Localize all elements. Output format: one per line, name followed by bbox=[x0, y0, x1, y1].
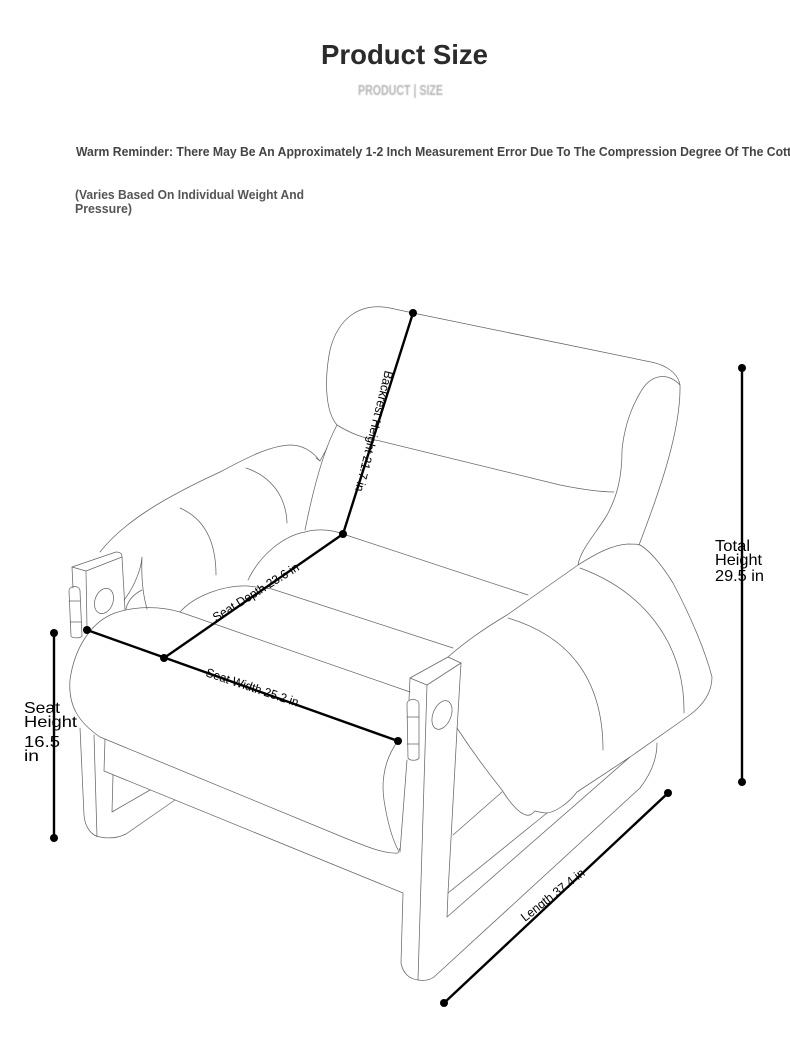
subtitle: PRODUCT | SIZE bbox=[358, 83, 443, 99]
dimension: total height: 29.5 in bbox=[715, 568, 764, 585]
pressure note: Pressure) bbox=[75, 202, 132, 216]
dimension: seat depth: Seat Depth 23.6 in bbox=[210, 560, 302, 625]
dimension: seat width: Seat Width 25.2 in bbox=[204, 666, 301, 710]
dimension: total height bbox=[715, 364, 764, 786]
dimension: length bbox=[440, 789, 672, 1007]
dimension: seat height: Height bbox=[24, 714, 78, 731]
chair frame base bbox=[80, 728, 657, 980]
dimension: backrest height: Backrest Height 21.7 in bbox=[352, 369, 396, 493]
seat cushion back section bbox=[180, 530, 528, 648]
pressure note bbox=[75, 188, 304, 216]
front seat cushion bbox=[70, 608, 410, 853]
dimension: length: Length 37.4 in bbox=[518, 866, 588, 924]
dimension: total height: Total bbox=[715, 538, 750, 555]
title: Product Size bbox=[321, 39, 488, 70]
dimension: backrest height bbox=[339, 309, 417, 538]
dimension: seat height: in bbox=[24, 748, 39, 765]
armchair line drawing bbox=[69, 307, 712, 980]
dimension: seat height bbox=[24, 629, 78, 842]
dimension: seat depth bbox=[160, 534, 343, 662]
right armrest bbox=[448, 544, 712, 815]
left front post with hinge bbox=[69, 552, 147, 638]
dimension: seat width bbox=[83, 626, 402, 745]
dimension: seat height: 16.5 bbox=[24, 734, 60, 751]
dimension: total height: Height bbox=[715, 552, 763, 569]
dimension: seat height: Seat bbox=[24, 700, 61, 717]
left armrest bbox=[100, 445, 327, 575]
right front post with hinge bbox=[400, 657, 630, 980]
backrest bbox=[305, 307, 680, 565]
pressure note: (Varies Based On Individual Weight And bbox=[75, 188, 304, 202]
